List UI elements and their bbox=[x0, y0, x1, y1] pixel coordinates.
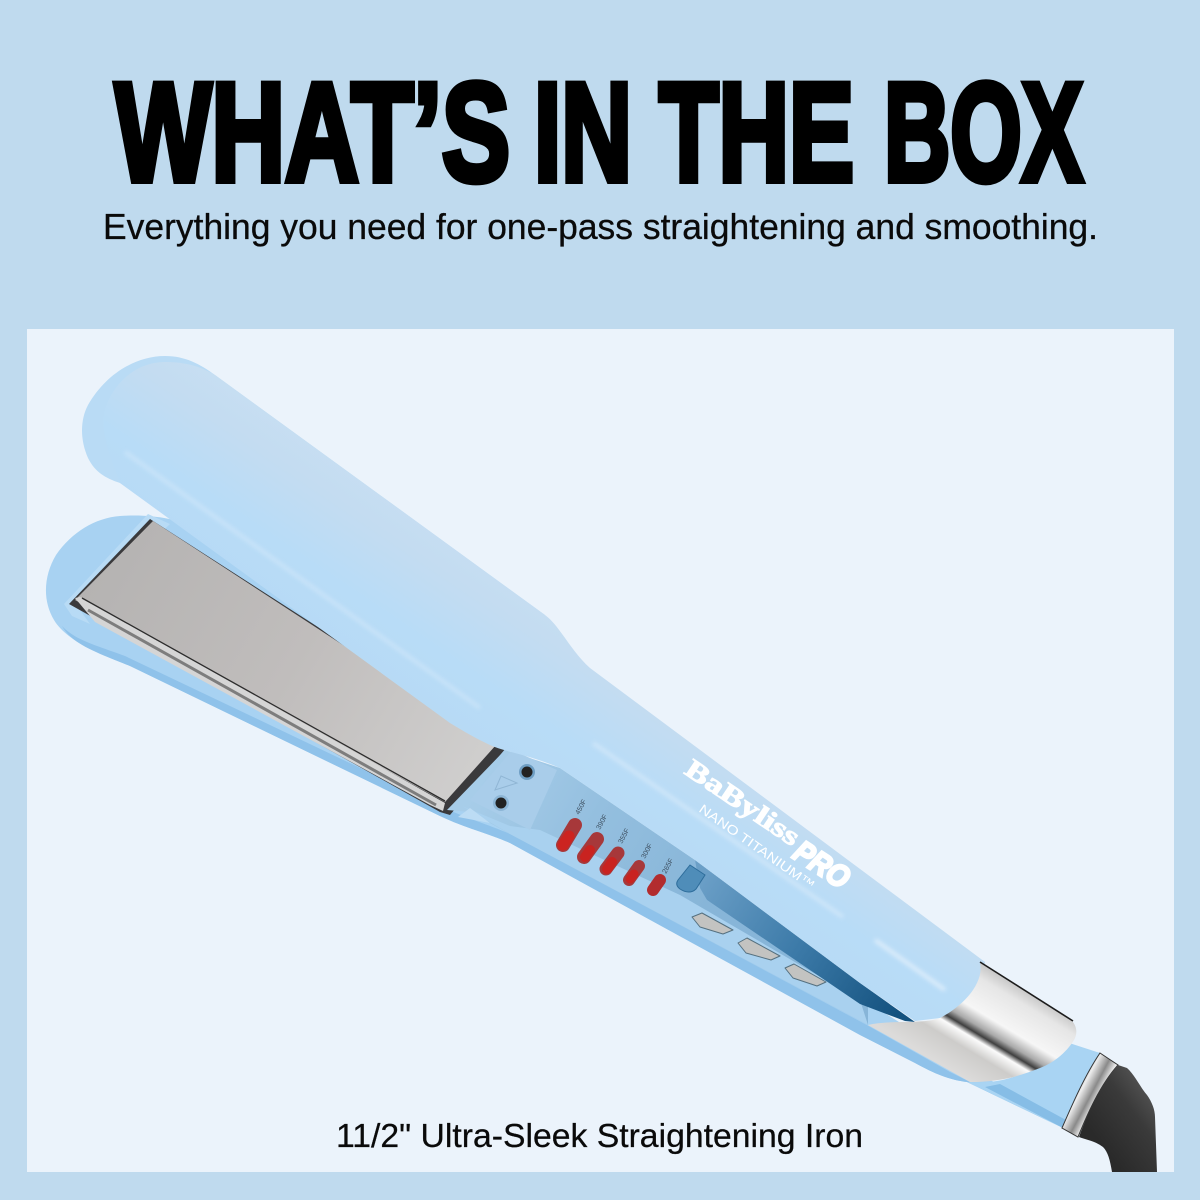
iron: chrome guard bbox=[868, 962, 1076, 1082]
iron: stamped plate bbox=[470, 750, 557, 830]
title: IN bbox=[534, 54, 632, 210]
iron: recess shadow bbox=[695, 860, 915, 1022]
title: WHAT’S bbox=[115, 54, 510, 210]
iron: upper arm highlight bbox=[125, 452, 480, 708]
iron: temperature labels: 300F bbox=[641, 843, 654, 860]
iron: silver heat plate bbox=[75, 521, 496, 802]
iron: lip wedge bbox=[458, 808, 490, 823]
iron: brand logo: BaByliss bbox=[680, 753, 806, 852]
iron: plate bevel bbox=[75, 597, 445, 811]
iron: control buttons bbox=[692, 913, 826, 986]
iron: upper arm rim bbox=[82, 356, 545, 640]
iron: lower arm front edge bbox=[62, 626, 1063, 1128]
iron: brand logo: NANO TITANIUM™ bbox=[696, 801, 818, 893]
iron: blue neck collar bbox=[967, 1040, 1100, 1128]
iron: brand logo bbox=[680, 753, 857, 896]
iron: handle highlight bbox=[593, 743, 843, 917]
iron: heat plate frame bbox=[69, 519, 506, 815]
iron: plate seat lip bbox=[64, 514, 170, 624]
caption: 11/2" Ultra-Sleek Straightening Iron bbox=[336, 1117, 863, 1154]
title: BOX bbox=[884, 54, 1083, 210]
iron: temperature labels: 355F bbox=[618, 828, 631, 845]
product: straightening iron bbox=[46, 356, 1157, 1172]
iron: chrome ring bbox=[1062, 1053, 1118, 1137]
iron: blue slider tab bbox=[677, 865, 705, 892]
iron: upper arm bbox=[103, 362, 985, 1021]
title bbox=[115, 54, 1083, 210]
iron: black cord boot bbox=[1079, 1065, 1157, 1172]
subtitle: Everything you need for one-pass straightening and smoothing. bbox=[103, 206, 1098, 247]
panel: product image background bbox=[27, 329, 1174, 1172]
iron: temperature indicator lights bbox=[563, 825, 660, 890]
iron: brand logo: PRO bbox=[787, 834, 857, 896]
title: THE bbox=[659, 54, 854, 210]
iron: lower arm bbox=[46, 516, 1063, 1128]
iron: temperature labels: 450F bbox=[575, 799, 588, 816]
iron: screws bbox=[493, 764, 535, 811]
iron: stamped triangle mark bbox=[495, 776, 517, 790]
iron: temperature labels: 390F bbox=[596, 814, 609, 831]
iron: control panel bbox=[447, 750, 868, 1025]
iron: temperature labels: 265F bbox=[662, 858, 675, 875]
iron: lighter strip under lights bbox=[462, 806, 868, 1025]
iron: temperature labels bbox=[575, 799, 675, 875]
